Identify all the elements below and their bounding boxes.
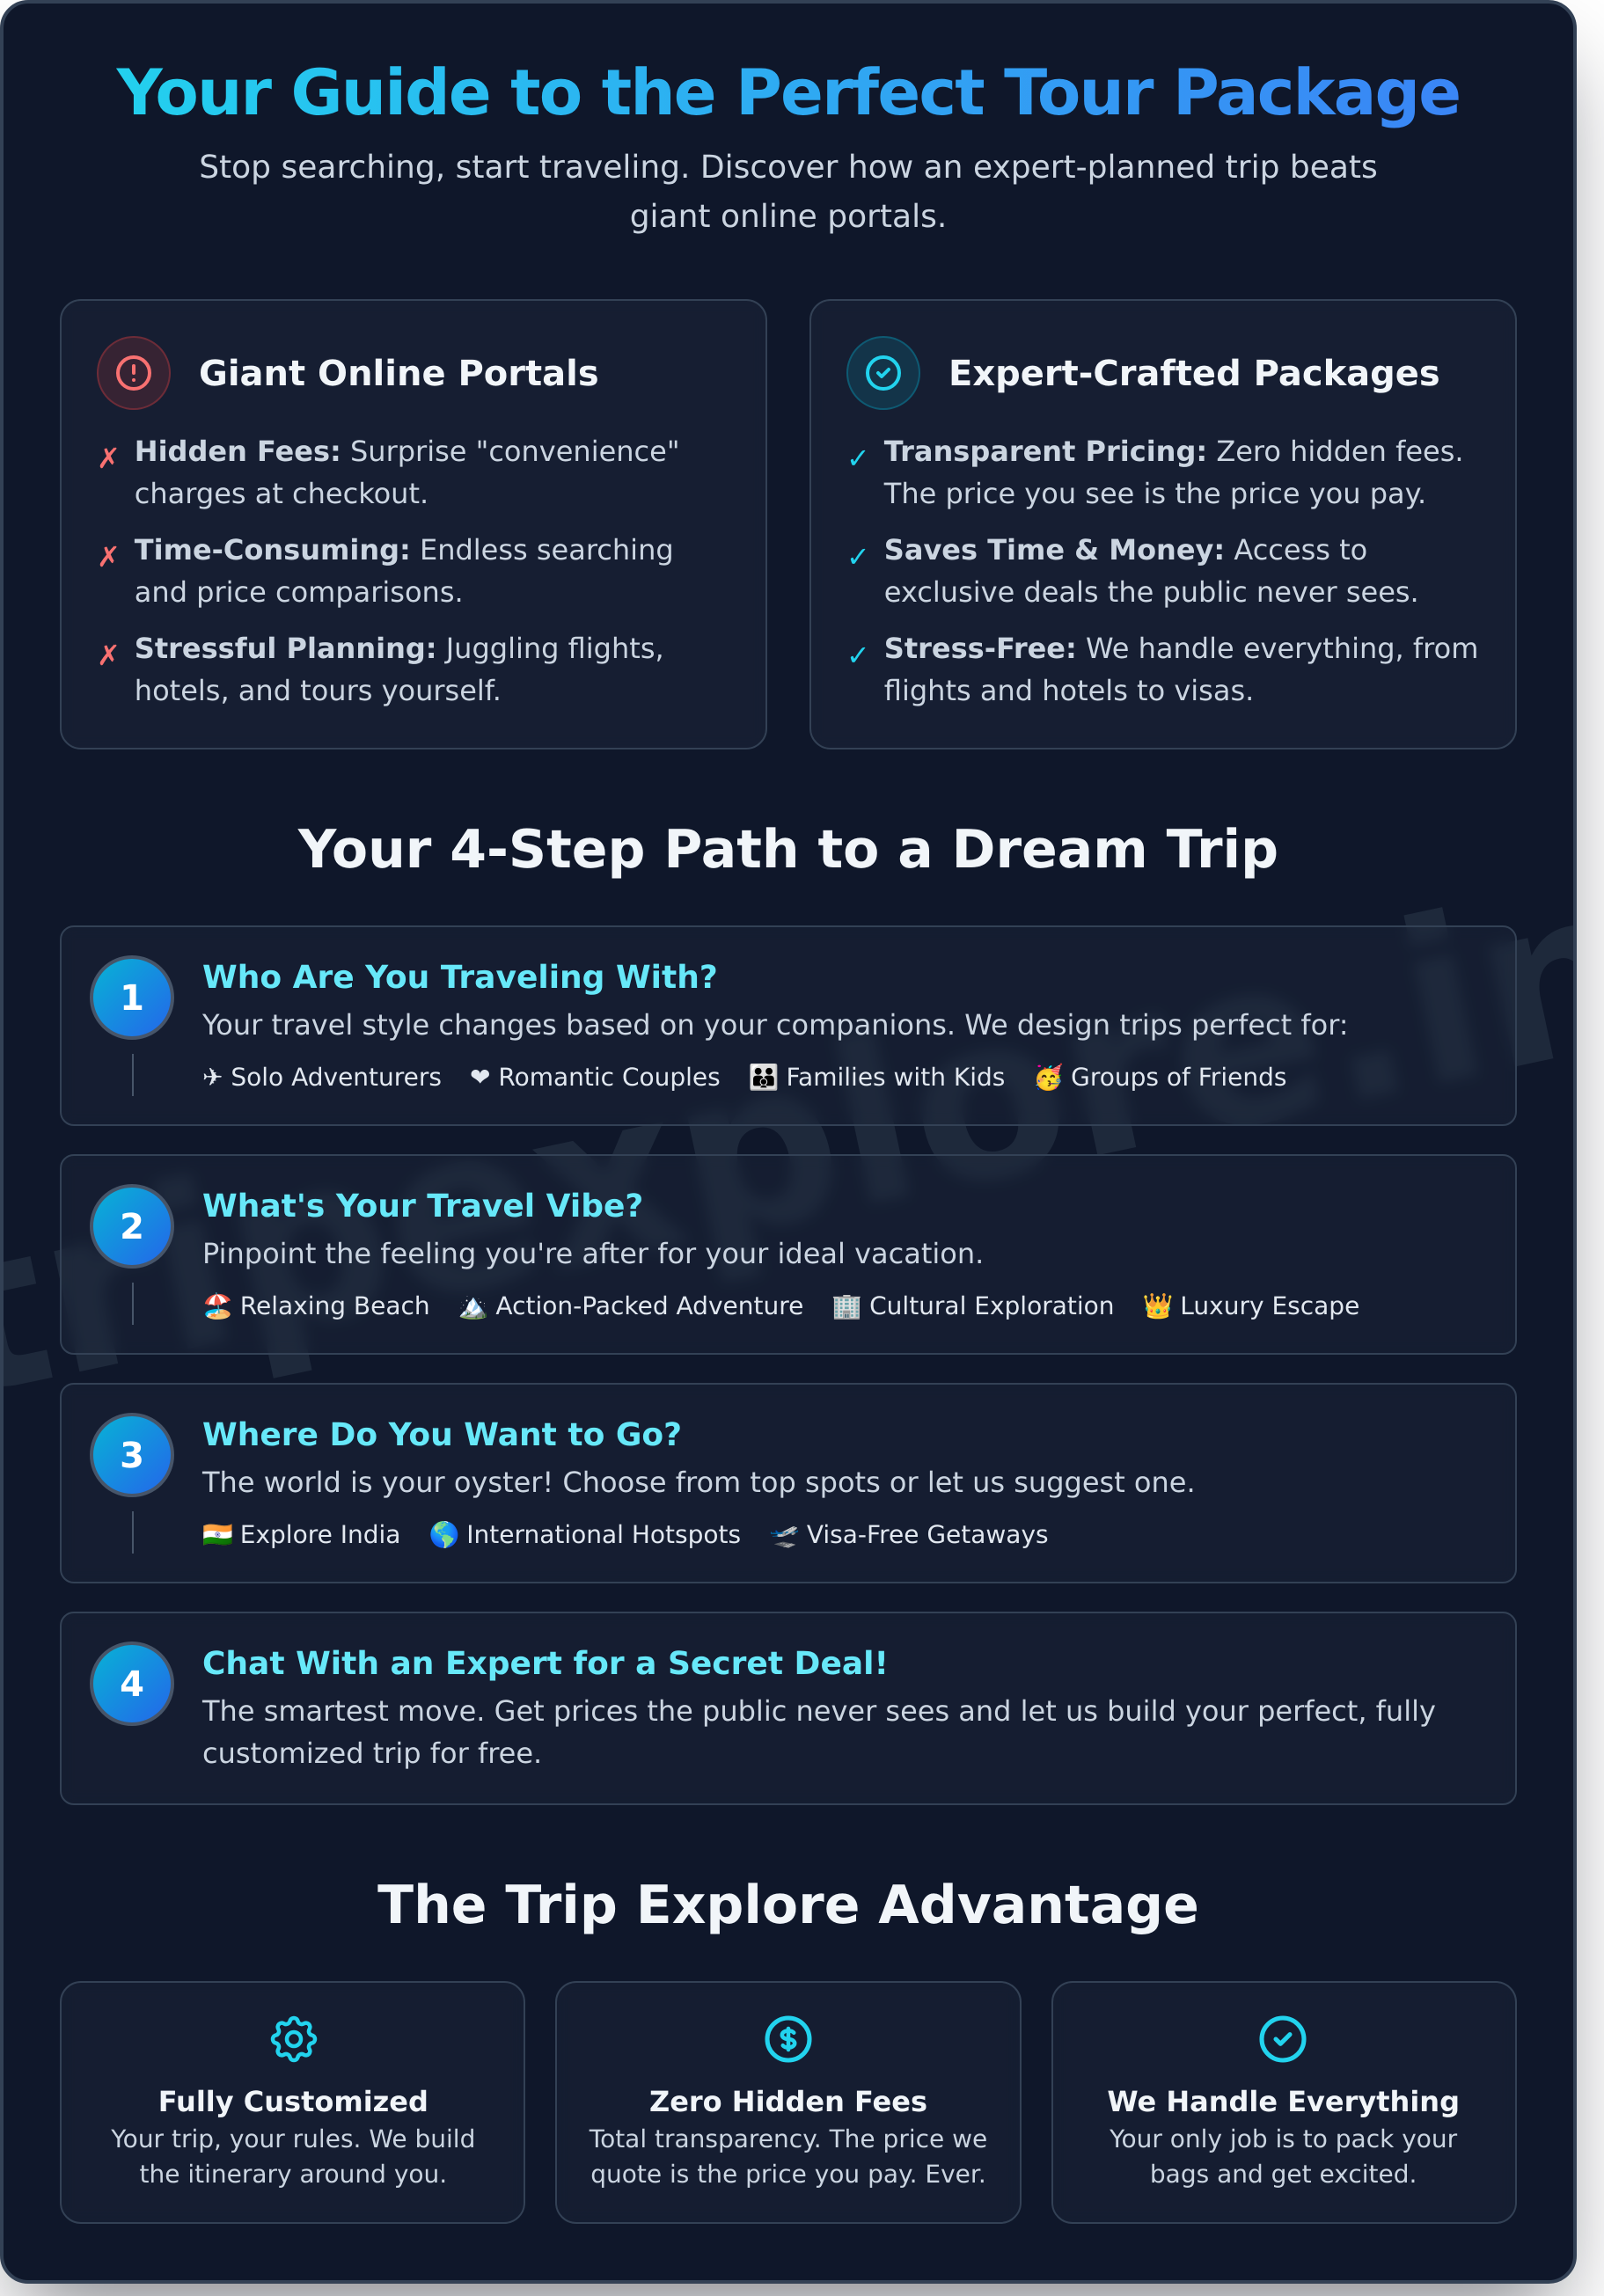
step 1 options: 👪 Families with Kids	[749, 1063, 1005, 1092]
heading: giant online portals: Giant Online Portals	[199, 354, 599, 394]
step number 3: 3	[120, 1436, 144, 1476]
item: transparent pricing: The price you see is the price you pay.	[884, 477, 1426, 510]
subtitle: giant online portals.	[630, 199, 947, 235]
text: fully customized: Your trip, your rules. We build	[111, 2124, 475, 2153]
panel: step 3	[60, 1383, 1517, 1583]
item: stressful planning: hotels, and tours yourself.	[135, 674, 502, 707]
panel: step 1	[60, 925, 1517, 1126]
heading: we handle everything: We Handle Everything	[1107, 2085, 1460, 2118]
step number 2	[90, 1184, 174, 1269]
item: stress-free: ✓	[846, 639, 870, 672]
item: time-consuming: ✗	[97, 540, 121, 574]
step number 4	[90, 1642, 174, 1726]
item: time-consuming	[97, 533, 674, 609]
item: transparent pricing: ✓	[846, 442, 870, 475]
item: hidden fees: ✗	[97, 442, 121, 475]
text: zero hidden fees	[590, 2124, 987, 2189]
list: portal drawbacks	[97, 435, 680, 707]
item: transparent pricing: Transparent Pricing: Zero hidden fees.	[884, 435, 1464, 468]
item: stress-free	[846, 632, 1478, 707]
item: hidden fees	[97, 435, 680, 510]
step 1 options	[202, 1063, 1286, 1092]
item: time-consuming: and price comparisons.	[135, 575, 464, 609]
panel: step 2	[60, 1154, 1517, 1355]
title: Your Guide to the Perfect Tour Package	[117, 55, 1460, 129]
step 3 options: 🛫 Visa-Free Getaways	[769, 1520, 1049, 1549]
text: fully customized: the itinerary around you.	[139, 2160, 447, 2189]
step number 3	[90, 1413, 174, 1497]
heading: zero hidden fees: Zero Hidden Fees	[649, 2085, 927, 2118]
panel: expert-crafted packages	[809, 299, 1517, 749]
item: hidden fees: Hidden Fees: Surprise "convenience"	[135, 435, 680, 468]
text: fully customized	[111, 2124, 475, 2189]
subtitle	[199, 150, 1378, 235]
list: package benefits	[846, 435, 1478, 707]
panel: we handle everything	[1051, 1981, 1517, 2224]
item: stress-free: Stress-Free: We handle everything, from	[884, 632, 1478, 665]
item: saves time and money: Saves Time & Money: Access to	[884, 533, 1367, 567]
item: time-consuming: Time-Consuming: Endless searching	[135, 533, 674, 567]
text: we handle everything: bags and get excited.	[1150, 2160, 1417, 2189]
step 2 description: Pinpoint the feeling you're after for your ideal vacation.	[202, 1237, 984, 1270]
step 2 options: 🏢 Cultural Exploration	[831, 1291, 1115, 1320]
step 3 options: 🇮🇳 Explore India	[202, 1520, 400, 1549]
step number 4: 4	[120, 1664, 144, 1705]
item: saves time and money: exclusive deals the public never sees.	[884, 575, 1419, 609]
step 1 options: ❤ Romantic Couples	[470, 1063, 721, 1092]
step 4 heading: Chat With an Expert for a Secret Deal!	[202, 1646, 889, 1682]
step 2 options: 👑 Luxury Escape	[1143, 1291, 1359, 1320]
panel: giant online portals	[60, 299, 767, 749]
item: saves time and money: ✓	[846, 540, 870, 574]
item: stress-free: flights and hotels to visas.	[884, 674, 1254, 707]
step 3 heading: Where Do You Want to Go?	[202, 1417, 682, 1453]
panel: fully customized	[60, 1981, 525, 2224]
icon: check circle	[1255, 2011, 1311, 2067]
step 3 description: The world is your oyster! Choose from top spots or let us suggest one.	[202, 1466, 1196, 1499]
connector line	[132, 1511, 134, 1554]
step 4 description: customized trip for free.	[202, 1737, 542, 1770]
text: we handle everything: Your only job is to pack your	[1110, 2124, 1457, 2153]
subtitle: Stop searching, start traveling. Discover how an expert-planned trip beats	[199, 150, 1378, 186]
panel: step 4	[60, 1612, 1517, 1805]
item: stressful planning	[97, 632, 664, 707]
step 1 options: ✈ Solo Adventurers	[202, 1063, 442, 1092]
panel: zero hidden fees	[555, 1981, 1022, 2224]
connector line	[132, 1283, 134, 1325]
step 2 heading: What's Your Travel Vibe?	[202, 1188, 643, 1225]
item: stressful planning: Stressful Planning: Juggling flights,	[135, 632, 664, 665]
item: saves time and money	[846, 533, 1419, 609]
step number 1	[90, 955, 174, 1040]
text: zero hidden fees: quote is the price you pay. Ever.	[590, 2160, 986, 2189]
step number 2: 2	[120, 1207, 144, 1247]
step 2 options: 🏔️ Action-Packed Adventure	[458, 1291, 803, 1320]
icon: dollar	[765, 2016, 811, 2062]
text: zero hidden fees: Total transparency. The price we	[590, 2124, 987, 2153]
icon: gear	[271, 2016, 317, 2062]
connector line	[132, 1054, 134, 1096]
heading: the trip explore advantage: The Trip Explore Advantage	[377, 1875, 1199, 1936]
icon: red alert	[97, 336, 171, 410]
step 1 options: 🥳 Groups of Friends	[1033, 1063, 1286, 1092]
step 4 description: The smartest move. Get prices the public never sees and let us build your perfect, fully	[202, 1694, 1436, 1728]
step 2 options: 🏖️ Relaxing Beach	[202, 1291, 430, 1320]
step number 1: 1	[120, 978, 144, 1019]
heading: fully customized: Fully Customized	[158, 2085, 428, 2118]
step 1 description: Your travel style changes based on your companions. We design trips perfect for:	[202, 1008, 1349, 1042]
heading: expert-crafted packages: Expert-Crafted Packages	[948, 354, 1440, 394]
item: stressful planning: ✗	[97, 639, 121, 672]
item: transparent pricing	[846, 435, 1464, 510]
step 3 options: 🌎 International Hotspots	[428, 1520, 741, 1549]
item: hidden fees: charges at checkout.	[135, 477, 428, 510]
step 3 options	[202, 1520, 1049, 1549]
heading: 4-step path: Your 4-Step Path to a Dream Trip	[298, 819, 1278, 881]
icon: cyan check	[846, 336, 920, 410]
step 2 options	[202, 1291, 1359, 1320]
text: we handle everything	[1053, 2122, 1514, 2192]
step 1 heading: Who Are You Traveling With?	[202, 960, 718, 996]
step 4 description	[202, 1694, 1436, 1770]
